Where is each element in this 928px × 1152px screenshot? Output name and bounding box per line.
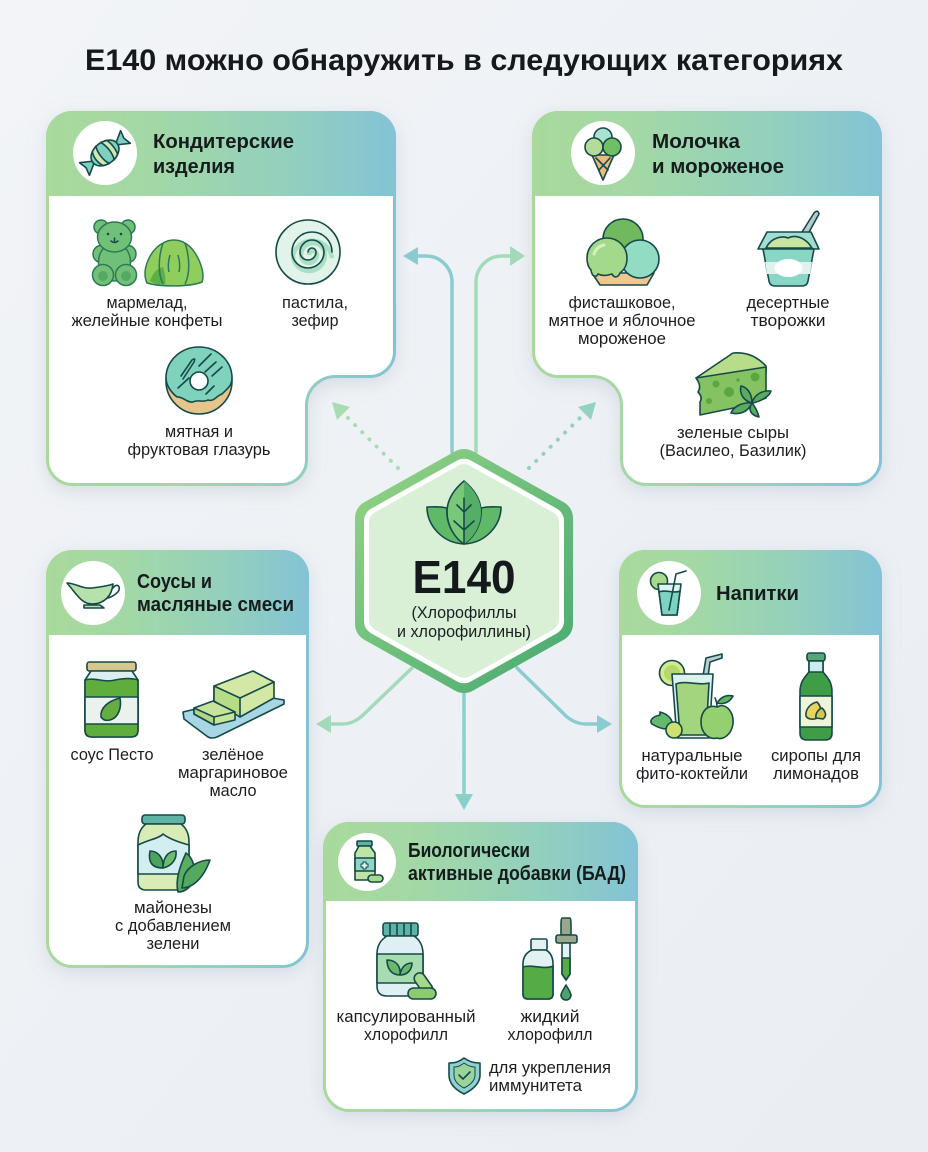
label: творожки xyxy=(750,312,826,330)
subtitle: (Хлорофиллы xyxy=(412,604,516,622)
arrow: to supplements xyxy=(455,690,473,810)
label: для укрепления xyxy=(489,1059,611,1077)
title: E140 можно обнаружить в следующих категориях xyxy=(85,44,843,77)
code: E140 xyxy=(412,551,516,603)
icon: supplement bottle xyxy=(338,833,396,891)
panel: dietary supplements xyxy=(323,822,638,1110)
header band xyxy=(46,111,396,196)
icon: shield xyxy=(449,1058,480,1094)
icon: glazed donut xyxy=(166,347,232,414)
header band xyxy=(46,550,309,635)
icon: glass with straw xyxy=(637,561,701,625)
panel: sauces xyxy=(46,550,309,966)
icon: dropper bottle xyxy=(523,918,577,1000)
label: маргариновое xyxy=(178,764,288,782)
panel: confectionery xyxy=(46,111,396,484)
arrow: to sauces xyxy=(316,668,412,733)
arrow: dotted to confectionery xyxy=(332,402,398,468)
icon: green cheese with basil xyxy=(696,353,771,417)
label: капсулированный xyxy=(336,1008,476,1026)
icon: gravy boat xyxy=(61,561,125,625)
heading: и мороженое xyxy=(652,156,784,178)
label: мороженое xyxy=(578,330,666,348)
label: мятная и xyxy=(165,423,233,441)
label: фруктовая глазурь xyxy=(128,441,270,459)
heading: Биологически xyxy=(408,840,530,862)
panel: dairy and ice cream xyxy=(532,111,882,484)
heading: активные добавки (БАД) xyxy=(408,863,626,885)
heading: Соусы и xyxy=(137,571,212,593)
central hexagon xyxy=(373,467,555,675)
heading: масляные смеси xyxy=(137,594,294,616)
icon: ice cream cone xyxy=(571,121,635,185)
header band xyxy=(532,111,882,196)
header band xyxy=(323,822,638,901)
icon: margarine on a tray xyxy=(183,671,284,738)
label: мятное и яблочное xyxy=(548,312,696,330)
icon: syrup bottle xyxy=(800,653,832,740)
label: жидкий xyxy=(520,1008,580,1026)
subtitle: и хлорофиллины) xyxy=(397,623,531,641)
icon: candy xyxy=(73,121,137,185)
label: натуральные xyxy=(642,747,742,765)
icon: pastila swirl xyxy=(276,220,340,284)
icon: leaves xyxy=(427,481,501,544)
label: соус Песто xyxy=(70,746,154,764)
label: желейные конфеты xyxy=(72,312,222,330)
label: зелёное xyxy=(202,746,264,764)
label: лимонадов xyxy=(773,765,859,783)
header band xyxy=(619,550,882,635)
label: масло xyxy=(210,782,256,800)
label: мармелад, xyxy=(106,294,188,312)
icon: capsule bottle xyxy=(377,923,436,999)
icon: yogurt cup xyxy=(758,211,819,286)
label: (Василео, Базилик) xyxy=(660,442,806,460)
heading: изделия xyxy=(153,156,235,178)
label: иммунитета xyxy=(489,1077,583,1095)
label: хлорофилл xyxy=(364,1026,448,1044)
icon: ice cream scoops xyxy=(587,219,659,285)
label: пастила, xyxy=(282,294,348,312)
label: фито-коктейли xyxy=(636,765,748,783)
label: майонезы xyxy=(134,899,212,917)
icon: mayonnaise jar with herbs xyxy=(138,815,210,892)
label: фисташковое, xyxy=(568,294,676,312)
icon: green smoothie with apple xyxy=(651,654,733,738)
icon: pesto jar xyxy=(85,662,138,737)
arrow: to confectionery xyxy=(403,247,452,452)
arrow: to dairy xyxy=(476,246,525,452)
label: с добавлением xyxy=(115,917,231,935)
heading: Кондитерские xyxy=(153,131,294,153)
label: зеленые сыры xyxy=(677,424,789,442)
panel: drinks xyxy=(619,550,882,806)
icon: gummy bear and jelly xyxy=(92,220,203,286)
label: хлорофилл xyxy=(508,1026,592,1044)
label: сиропы для xyxy=(771,747,861,765)
label: зефир xyxy=(292,312,338,330)
label: десертные xyxy=(746,294,830,312)
heading: Напитки xyxy=(716,583,799,605)
arrow: to drinks xyxy=(517,668,612,733)
label: зелени xyxy=(146,935,200,953)
arrow: dotted to dairy xyxy=(529,402,596,468)
heading: Молочка xyxy=(652,131,741,153)
